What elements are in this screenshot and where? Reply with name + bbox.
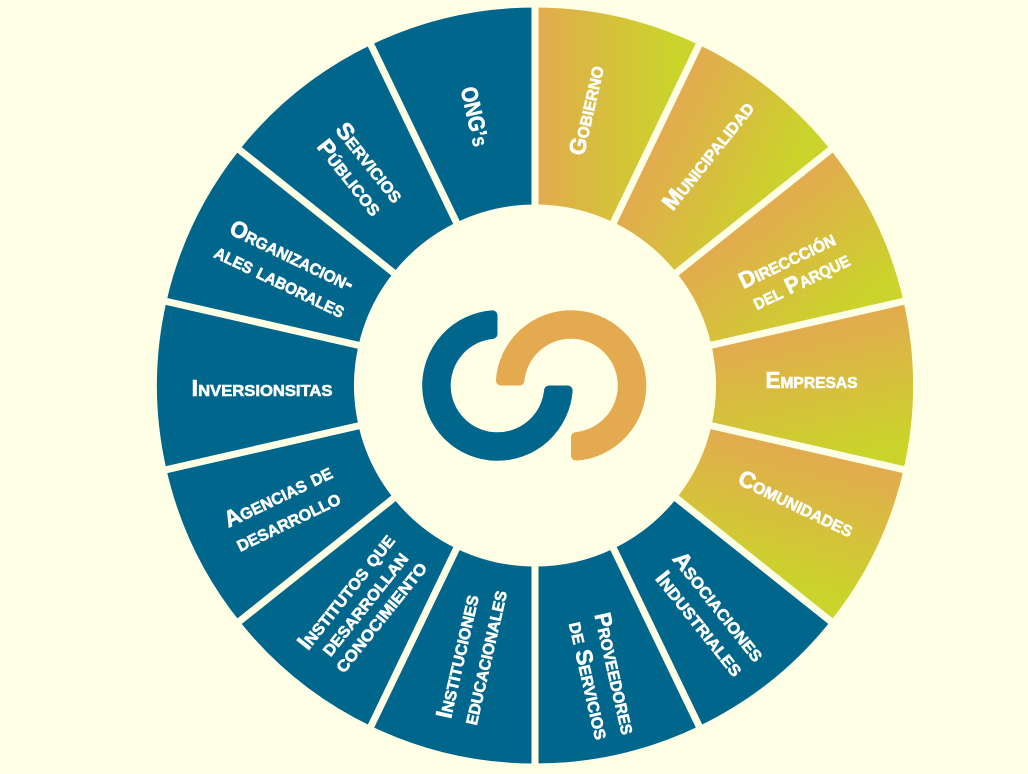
segment: Proveedores de Servicios: Proveedores	[589, 610, 642, 737]
segment: Inversionsitas: Inversionsitas	[192, 375, 333, 401]
logo: orange arc	[501, 315, 641, 456]
segment: Municipalidad: Municipalidad	[656, 95, 759, 215]
segment: Asociaciones Industriales: Asociaciones	[668, 546, 771, 666]
segment: Proveedores de Servicios: de Servicios	[564, 619, 616, 742]
segment: Institutos que desarrollan conocimiento: Institutos que	[292, 528, 400, 654]
segment: Servicios Públicos: Públicos	[312, 134, 389, 221]
segment: Dirección del Parque: del Parque	[748, 246, 854, 315]
segment: Comunidades	[654, 421, 907, 632]
segment: Gobierno	[535, 4, 701, 226]
segment: Servicios Públicos	[237, 18, 513, 286]
segment: Dirección del Parque	[660, 148, 936, 415]
segment: Instituciones educacionales: educacionales	[456, 587, 512, 727]
segment: Institutos que desarrollan conocimiento: desarrollan	[314, 546, 413, 660]
segment: Organizaciones laborales	[163, 139, 416, 350]
center logo	[427, 315, 641, 456]
segment: Inversionsitas	[126, 260, 379, 470]
segment: Dirección del Parque: Direccción	[734, 225, 839, 294]
segment: Agencias de desarrollo: desarrollo	[231, 484, 344, 557]
segment: Organizaciones laborales: ales laborales	[211, 238, 350, 323]
segment: Servicios Públicos: Servicios	[331, 117, 410, 208]
segment: Agencias de desarrollo	[134, 356, 410, 623]
segment: Proveedores de Servicios	[455, 530, 701, 774]
segment: Comunidades: Comunidades	[734, 464, 859, 542]
segment: Gobierno: Gobierno	[563, 63, 609, 158]
segment: ONG's	[369, 0, 615, 241]
segment: Organizaciones laborales: Organizacion-	[226, 214, 359, 296]
logo: blue arc	[427, 315, 568, 456]
segment: Institutos que desarrollan conocimiento: conocimiento	[327, 555, 432, 677]
segment: Instituciones educacionales: Instituciones	[430, 592, 484, 721]
segment: ONG's: ONG’s	[456, 84, 494, 149]
segment: Asociaciones Industriales: Industriales	[651, 565, 750, 681]
segment: Agencias de desarrollo: Agencias de	[219, 458, 336, 532]
segment: Empresas: Empresas	[766, 367, 858, 393]
segment: Instituciones educacionales	[369, 545, 535, 767]
segment: Asociaciones Industriales	[557, 485, 833, 753]
segment: Municipalidad	[604, 42, 850, 313]
segment: Institutos que desarrollan conocimiento	[220, 458, 466, 729]
segment: Empresas	[691, 301, 944, 511]
